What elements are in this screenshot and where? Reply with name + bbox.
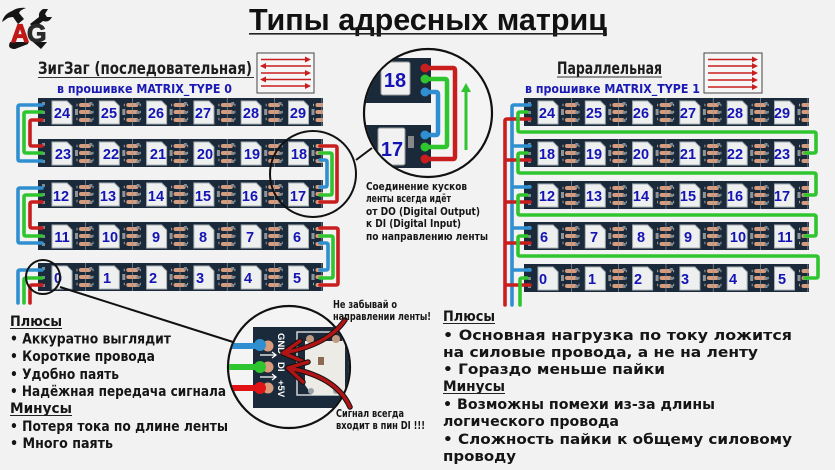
text: parallel pros and cons: проводу xyxy=(443,449,517,465)
strip rows: zigzag matrix: 10 xyxy=(102,230,118,246)
strip rows: parallel matrix: 9 xyxy=(684,230,692,246)
heading: parallel: Параллельная xyxy=(557,59,662,79)
strip rows: zigzag matrix: 16 xyxy=(242,189,258,205)
strip rows: parallel matrix: 14 xyxy=(633,189,649,205)
text: parallel pros and cons: Минусы xyxy=(443,379,505,395)
text: zigzag pros and cons: • Удобно паять xyxy=(10,367,119,383)
strip rows: zigzag matrix: 1 xyxy=(103,271,111,287)
strip rows: zigzag matrix: 28 xyxy=(243,106,259,122)
text: zigzag pros and cons: • Много паять xyxy=(10,436,113,452)
logo: hammer and wrench AG xyxy=(2,8,52,49)
strip rows: zigzag matrix: 22 xyxy=(103,147,119,163)
strip rows: zigzag matrix: 20 xyxy=(197,147,213,163)
strip rows: zigzag matrix: 19 xyxy=(244,147,260,163)
text: parallel pros and cons: • Возможны помехи из-за длины xyxy=(443,397,715,413)
text: zigzag pros and cons: Минусы xyxy=(10,401,72,417)
strip rows: parallel matrix: 24 xyxy=(539,106,555,122)
strip rows: parallel matrix: 2 xyxy=(634,272,642,288)
strip rows: parallel matrix: 4 xyxy=(729,272,737,288)
strip rows: parallel matrix: 11 xyxy=(777,230,793,246)
callout circles and leader lines xyxy=(26,131,372,342)
text: connection note: Соединение кусков xyxy=(366,182,467,193)
strip rows: parallel matrix: 28 xyxy=(727,106,743,122)
strip rows: zigzag matrix: 25 xyxy=(101,106,117,122)
callout: strip input pins: GND xyxy=(275,333,286,354)
text: parallel pros and cons xyxy=(443,309,793,465)
callout: strip input pins: +5V xyxy=(275,380,286,398)
callout: strip input pins: DI xyxy=(275,362,286,372)
text: zigzag pros and cons: • Потеря тока по длине ленты xyxy=(10,419,228,435)
strip rows: zigzag matrix: 4 xyxy=(244,271,252,287)
subheading: matrix type 0: в прошивке MATRIX_TYPE 0 xyxy=(57,82,232,97)
strip rows: zigzag matrix: 3 xyxy=(196,271,204,287)
text: connection note xyxy=(366,182,488,243)
callout: joint between LEDs 17 and 18: 18 xyxy=(384,70,406,92)
strip rows: parallel matrix: 20 xyxy=(633,147,649,163)
strip rows: parallel matrix: 26 xyxy=(633,106,649,122)
strip rows: zigzag matrix: 6 xyxy=(293,230,301,246)
strip rows: parallel matrix: 12 xyxy=(539,189,555,205)
icon: zigzag direction box xyxy=(257,53,314,93)
strip rows: parallel matrix: 1 xyxy=(588,272,596,288)
strip rows: parallel matrix: 5 xyxy=(778,272,786,288)
strip rows: parallel matrix: 27 xyxy=(680,106,696,122)
strip rows: zigzag matrix: 21 xyxy=(150,147,166,163)
title: Типы адресных матриц xyxy=(249,2,607,37)
strip rows: zigzag matrix: 17 xyxy=(290,189,306,205)
wires: parallel power buses and data line xyxy=(505,105,818,305)
strip rows: zigzag matrix xyxy=(38,98,330,291)
text: parallel pros and cons: Плюсы xyxy=(443,309,495,325)
strip rows: parallel matrix: 21 xyxy=(680,147,696,163)
text: connection note: к DI (Digital Input) xyxy=(366,219,461,230)
strip rows: parallel matrix: 8 xyxy=(637,230,645,246)
text: remember direction note: направлении ленты! xyxy=(333,312,431,323)
icon: parallel direction box xyxy=(704,53,762,93)
strip rows: parallel matrix: 0 xyxy=(539,272,547,288)
subheading: matrix type 1: в прошивке MATRIX_TYPE 1 xyxy=(525,82,700,97)
strip rows: zigzag matrix: 7 xyxy=(246,230,254,246)
heading: zigzag: ЗигЗаг (последовательная) xyxy=(38,59,252,79)
wires: zigzag connections xyxy=(18,105,338,303)
strip rows: parallel matrix: 13 xyxy=(586,189,602,205)
text: signal note: входит в пин DI !!! xyxy=(336,421,425,432)
callout: joint between LEDs 17 and 18 xyxy=(360,49,492,177)
strip rows: parallel matrix: 10 xyxy=(730,230,746,246)
strip rows: zigzag matrix: 12 xyxy=(53,189,69,205)
callout: joint between LEDs 17 and 18: 17 xyxy=(381,139,403,161)
text: zigzag pros and cons xyxy=(10,314,228,452)
text: zigzag pros and cons: • Надёжная передача сигнала xyxy=(10,384,226,400)
strip rows: zigzag matrix: 9 xyxy=(152,230,160,246)
text: parallel pros and cons: логического провода xyxy=(443,414,619,430)
strip rows: zigzag matrix: 15 xyxy=(195,189,211,205)
text: parallel pros and cons: • Основная нагрузка по току ложится xyxy=(443,328,792,344)
arrow: remember direction xyxy=(283,320,345,361)
strip rows: zigzag matrix: 11 xyxy=(54,230,70,246)
text: signal note: Сигнал всегда xyxy=(336,409,404,420)
strip rows: zigzag matrix: 29 xyxy=(290,106,306,122)
strip rows: parallel matrix: 3 xyxy=(681,272,689,288)
strip rows: zigzag matrix: 23 xyxy=(55,147,71,163)
strip rows: parallel matrix: 29 xyxy=(774,106,790,122)
text: signal note xyxy=(336,409,425,432)
text: connection note: ленты всегда идёт xyxy=(366,193,451,205)
strip rows: zigzag matrix: 5 xyxy=(293,271,301,287)
logo: hammer and wrench AG: A xyxy=(11,20,29,48)
strip rows: parallel matrix: 17 xyxy=(774,189,790,205)
strip rows: parallel matrix: 6 xyxy=(540,230,548,246)
text: remember direction note xyxy=(333,299,431,323)
text: zigzag pros and cons: • Короткие провода xyxy=(10,349,155,365)
strip rows: zigzag matrix: 8 xyxy=(199,230,207,246)
strip rows: parallel matrix: 23 xyxy=(774,147,790,163)
strip rows: parallel matrix: 7 xyxy=(590,230,598,246)
strip rows: parallel matrix: 19 xyxy=(586,147,602,163)
text: remember direction note: Не забывай о xyxy=(333,299,397,311)
strip rows: zigzag matrix: 18 xyxy=(291,147,307,163)
arrow: signal into DI xyxy=(288,362,350,407)
strip rows: zigzag matrix: 13 xyxy=(100,189,116,205)
strip rows: zigzag matrix: 14 xyxy=(148,189,164,205)
strip rows: parallel matrix: 22 xyxy=(727,147,743,163)
strip rows: parallel matrix: 15 xyxy=(680,189,696,205)
strip rows: zigzag matrix: 26 xyxy=(148,106,164,122)
logo: hammer and wrench AG: G xyxy=(27,20,46,48)
text: zigzag pros and cons: Плюсы xyxy=(10,314,62,330)
strip rows: parallel matrix: 16 xyxy=(727,189,743,205)
strip rows: zigzag matrix: 27 xyxy=(195,106,211,122)
strip rows: parallel matrix: 25 xyxy=(586,106,602,122)
text: connection note: от DO (Digital Output) xyxy=(366,207,480,218)
text: parallel pros and cons: • Сложность пайки к общему силовому xyxy=(443,432,793,448)
strip rows: zigzag matrix: 0 xyxy=(54,271,62,287)
text: connection note: по направлению ленты xyxy=(366,232,488,243)
strip rows: parallel matrix: 18 xyxy=(539,147,555,163)
strip rows: parallel matrix xyxy=(524,98,816,292)
text: zigzag pros and cons: • Аккуратно выглядит xyxy=(10,332,171,348)
strip rows: zigzag matrix: 24 xyxy=(54,106,70,122)
callout: strip input pins xyxy=(226,306,350,428)
strip rows: zigzag matrix: 2 xyxy=(149,271,157,287)
text: parallel pros and cons: на силовые провода, а не на ленту xyxy=(443,345,759,361)
text: parallel pros and cons: • Гораздо меньше пайки xyxy=(443,362,665,378)
